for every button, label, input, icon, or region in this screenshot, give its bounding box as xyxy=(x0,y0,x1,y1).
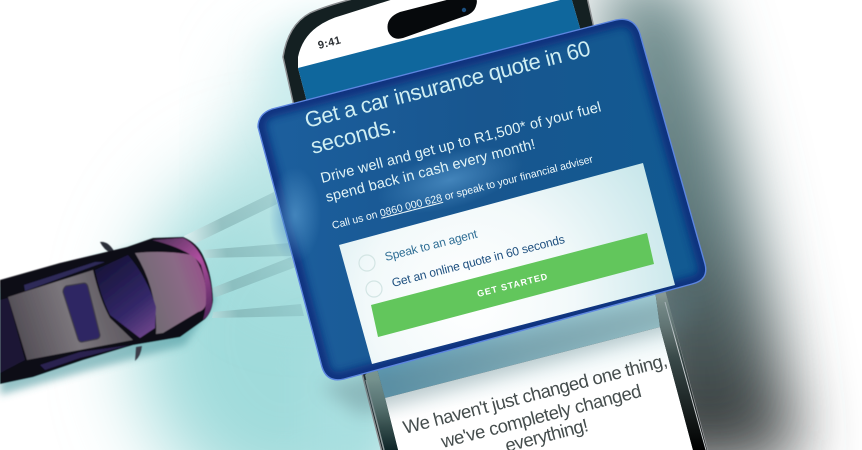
light beams from car headlights xyxy=(184,192,304,318)
subheading: Drive well and get up to R1,500* of your fuel xyxy=(319,100,603,187)
heading: Get a car insurance quote in 60 xyxy=(302,36,593,133)
card inner dark edge xyxy=(258,19,706,380)
option: online quote: Get an online quote in 60 seconds xyxy=(390,232,566,290)
phone xyxy=(283,0,710,450)
background: teal glow behind car and phone xyxy=(135,10,435,450)
phone screen xyxy=(298,0,655,398)
lower page heading: we've completely changed xyxy=(438,380,643,450)
windshield xyxy=(95,255,156,338)
car ground shadow xyxy=(0,240,215,395)
status time: 9:41 xyxy=(317,35,342,52)
card rim light xyxy=(258,19,706,380)
phone left lower bezel xyxy=(365,365,398,450)
radio: speak to an agent xyxy=(359,255,375,271)
contact line: Call us on 0860 000 628 or speak to your financial adviser xyxy=(331,153,595,232)
car body xyxy=(0,237,213,384)
card light patches xyxy=(269,134,530,263)
phone right edge highlight xyxy=(665,302,706,450)
lower white page area xyxy=(385,327,693,450)
side window strip top xyxy=(24,262,105,291)
insurance quote card xyxy=(258,19,706,380)
car xyxy=(0,237,215,395)
hood purple trim xyxy=(152,238,212,320)
form panel xyxy=(339,163,675,364)
subheading: spend back in cash every month! xyxy=(324,137,537,206)
option: speak to an agent: Speak to an agent xyxy=(383,227,479,264)
lower pale blue band xyxy=(376,290,660,398)
side window strip bottom xyxy=(40,345,130,370)
sunroof xyxy=(63,283,100,342)
phone left edge highlight xyxy=(366,380,384,450)
mirror top xyxy=(100,242,114,253)
mirror bottom xyxy=(135,346,142,361)
radio: online quote xyxy=(366,281,382,297)
phone right bezel xyxy=(655,290,707,450)
drop shadow to the right of the card xyxy=(600,0,800,450)
green button xyxy=(371,233,654,337)
camera dot xyxy=(462,8,466,12)
blue header band xyxy=(298,0,655,398)
button label: GET STARTED xyxy=(476,271,549,299)
card body xyxy=(258,19,706,380)
lower page heading: We haven't just changed one thing, xyxy=(401,349,669,438)
dynamic island xyxy=(388,0,477,39)
roof xyxy=(8,270,133,360)
hood xyxy=(135,252,207,334)
card shadow below xyxy=(320,285,706,415)
heading: seconds. xyxy=(308,113,399,159)
phone frame xyxy=(283,0,710,450)
rear window xyxy=(0,298,25,373)
